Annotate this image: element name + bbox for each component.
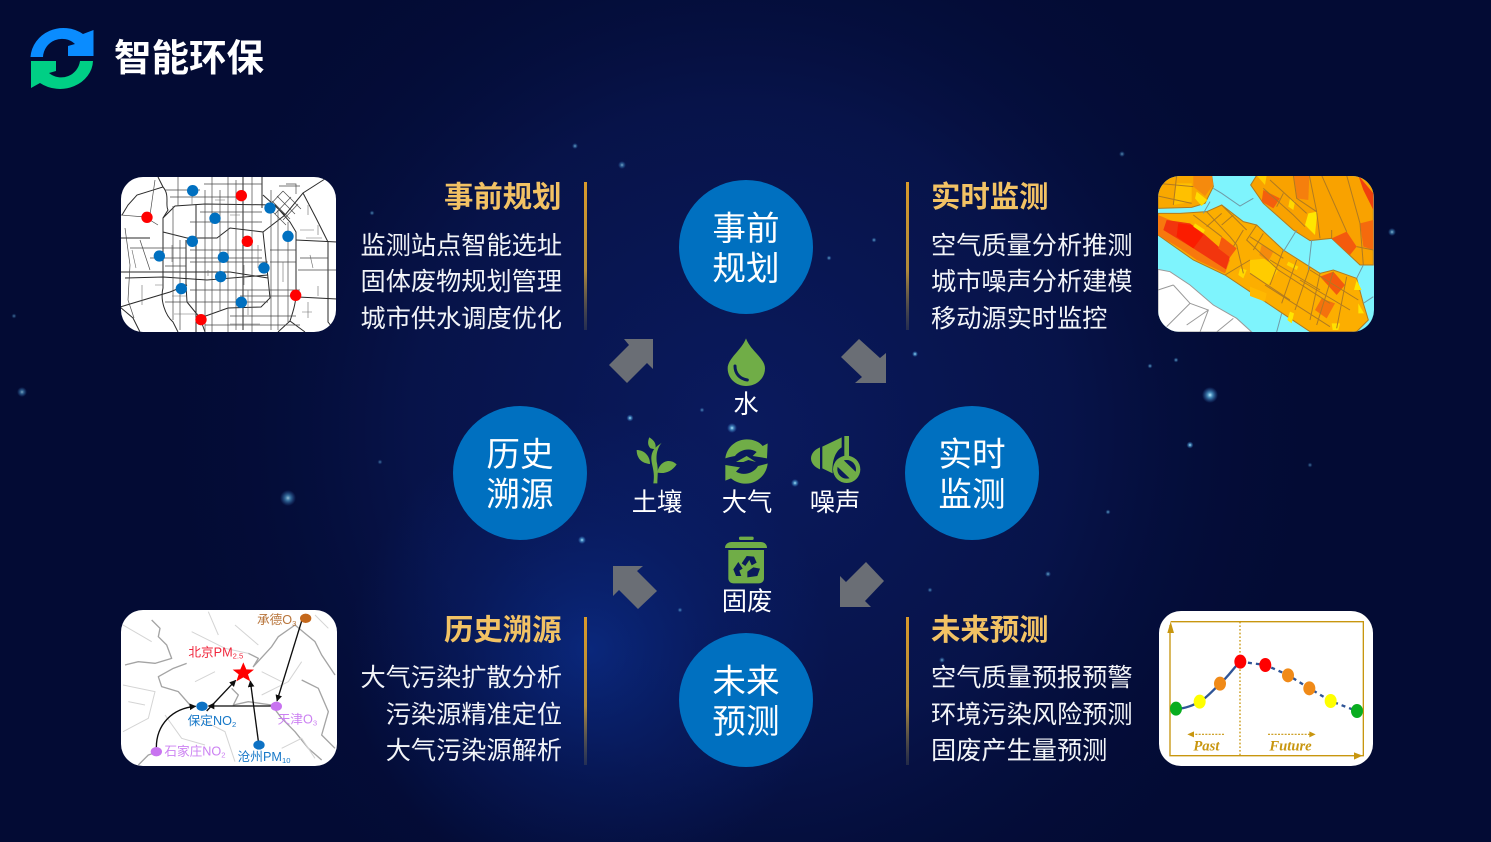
road lines (120, 177, 338, 332)
divider: bottom right (906, 617, 909, 765)
city labels: 3 (313, 718, 317, 727)
chart frame and axes (1170, 622, 1363, 756)
text block: 未来预测 items: 固废产生量预测 (931, 737, 1107, 765)
city labels: 10 (282, 756, 290, 765)
label: 土壤: 土壤 (632, 489, 682, 517)
circle: 历史溯源: 溯源 (486, 476, 554, 514)
icon: recycle air (725, 439, 768, 484)
past and future markers (1193, 733, 1310, 736)
panel: forecast chart: Past (1193, 739, 1220, 755)
heading: 历史溯源: 历史溯源 (444, 614, 562, 647)
circle: 实时监测: 监测 (938, 477, 1006, 514)
province boundaries (125, 620, 335, 765)
heading: 事前规划: 事前规划 (444, 181, 562, 214)
panel: forecast chart (1159, 611, 1373, 766)
circle: 未来预测: 预测 (712, 704, 780, 741)
trend points (1170, 655, 1363, 718)
city labels: 北京PM (188, 646, 233, 660)
text block: 实时监测 items: 移动源实时监控 (931, 305, 1107, 333)
circle: 事前规划: 规划 (712, 250, 780, 288)
text block: 未来预测 items: 环境污染风险预测 (931, 701, 1132, 729)
circle: 历史溯源: 历史 (486, 437, 554, 474)
arrow: top left (609, 339, 653, 383)
text block: 事前规划 items (360, 232, 562, 333)
top right land (1251, 175, 1373, 265)
transport arrows (156, 621, 302, 748)
top left land (1158, 175, 1213, 208)
city labels: 3 (292, 619, 296, 628)
label: 水: 水 (733, 391, 759, 419)
text block: 历史溯源 items: 污染源精准定位 (386, 701, 562, 729)
text block: 历史溯源 items (360, 664, 562, 765)
arrow: top right (841, 339, 886, 383)
circle: 未来预测: 未来 (712, 663, 780, 701)
text block: 历史溯源 items: 大气污染源解析 (386, 737, 562, 765)
city labels (164, 613, 317, 765)
text block: 历史溯源 items: 大气污染扩散分析 (360, 664, 562, 692)
city labels: 承德O (257, 613, 292, 627)
text block: 实时监测 items (931, 232, 1132, 333)
trend line (1176, 662, 1240, 709)
water boundaries (1203, 188, 1373, 332)
panel: choropleth map (1158, 175, 1374, 332)
heading: 未来预测: 未来预测 (931, 614, 1049, 647)
title: 智能环保 (114, 37, 264, 79)
city labels: 2 (232, 720, 236, 729)
star: Beijing (233, 662, 254, 681)
circle: 实时监测: 实时 (938, 436, 1006, 474)
arrow: bottom left (613, 566, 657, 609)
city labels: 保定NO (188, 714, 232, 728)
icon: recycle bin (725, 537, 767, 583)
divider: bottom left (584, 617, 587, 765)
city labels: 天津O (278, 712, 313, 726)
icon: muted speaker (811, 436, 860, 483)
city labels: 2.5 (233, 652, 243, 661)
text block: 实时监测 items: 空气质量分析推测 (931, 232, 1132, 260)
divider: top left (584, 182, 587, 330)
city labels: 2 (221, 751, 226, 760)
text block: 事前规划 items: 固体废物规划管理 (360, 268, 562, 296)
heading: 实时监测: 实时监测 (931, 181, 1049, 214)
label: 大气: 大气 (722, 489, 772, 517)
main island (1158, 205, 1368, 332)
circle: 未来预测 (679, 633, 813, 767)
circle: 实时监测 (905, 406, 1039, 540)
text block: 实时监测 items: 城市噪声分析建模 (931, 268, 1132, 296)
white land (1158, 269, 1252, 332)
circle: 事前规划: 事前 (712, 210, 780, 248)
icon: water drop (728, 338, 765, 386)
divider: top right (906, 182, 909, 330)
map station dots (141, 185, 301, 325)
label: 固废: 固废 (722, 588, 772, 616)
text block: 未来预测 items: 空气质量预报预警 (931, 664, 1132, 692)
panel: forecast chart: Future (1268, 739, 1312, 755)
panel: pollution transport map (121, 610, 337, 766)
icon: plant (637, 437, 677, 483)
city labels: 沧州PM (238, 750, 282, 764)
text block: 事前规划 items: 城市供水调度优化 (360, 305, 562, 333)
text block: 未来预测 items (931, 664, 1132, 765)
city labels: 石家庄NO (164, 745, 221, 759)
logo icon (30, 28, 94, 89)
circle: 事前规划 (679, 180, 813, 314)
panel: road network map (120, 177, 338, 332)
text block: 事前规划 items: 监测站点智能选址 (360, 232, 562, 260)
circle: 历史溯源 (453, 406, 587, 540)
label: 噪声: 噪声 (810, 489, 860, 517)
arrow: bottom right (840, 562, 884, 607)
